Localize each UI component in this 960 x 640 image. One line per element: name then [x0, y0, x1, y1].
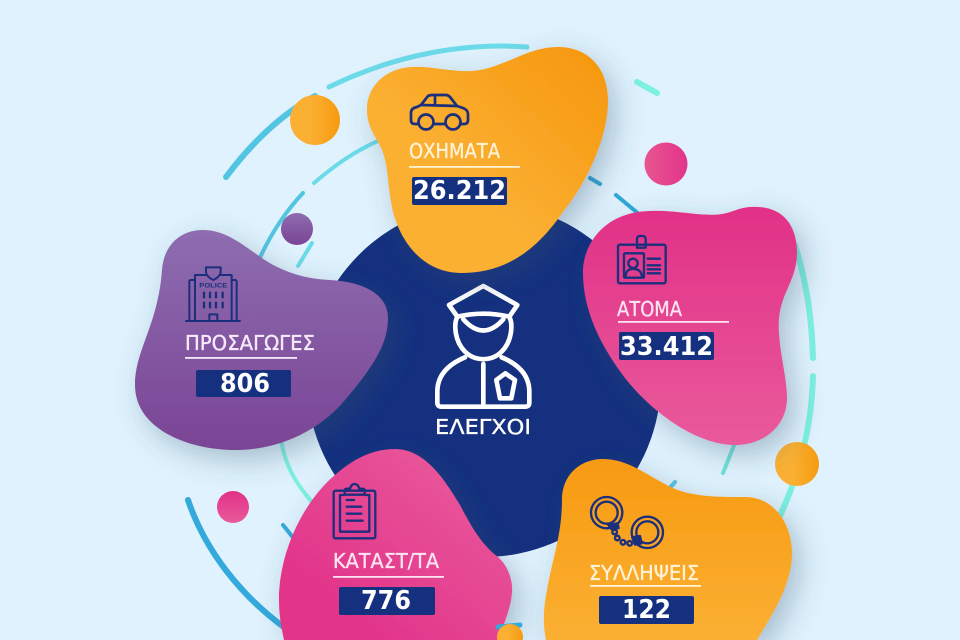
- icon: handcuffs: [591, 497, 663, 548]
- blob: pink right: [583, 207, 797, 445]
- number box: persons: 33.412: [620, 332, 713, 362]
- panel: records: [279, 449, 512, 640]
- panel: vehicles: [367, 47, 608, 273]
- label: detentions: ΠΡΟΣΑΓΩΓΕΣ: [185, 331, 315, 355]
- panel: detentions: [135, 230, 388, 450]
- label: arrests: ΣΥΛΛΗΨΕΙΣ: [589, 561, 699, 585]
- icon: police station: POLICE: [199, 283, 227, 289]
- number box: records: 776: [361, 586, 411, 616]
- blob: orange top: [367, 47, 608, 273]
- icon: clipboard: [334, 484, 375, 538]
- number box: arrests: 122: [622, 595, 671, 625]
- label: records: ΚΑΤΑΣΤ/ΤΑ: [333, 549, 439, 573]
- panel: arrests: [544, 459, 792, 640]
- label: checks: ΕΛΕΓΧΟΙ: [435, 415, 531, 439]
- central navy circle: [307, 203, 661, 557]
- blob: purple: [135, 230, 388, 450]
- dot: orange bottom: [497, 624, 523, 640]
- panel: persons: [583, 207, 797, 445]
- icon: id badge: [618, 236, 666, 283]
- label: vehicles: ΟΧΗΜΑΤΑ: [409, 139, 500, 163]
- blob: orange bottom: [544, 459, 792, 640]
- number box: detentions: 806: [220, 369, 270, 399]
- number box: arrests: [599, 595, 694, 625]
- icon: police station: [186, 267, 240, 321]
- icon: car: [411, 95, 468, 130]
- number box: records: [339, 586, 435, 616]
- bottom arc stub: [498, 625, 520, 627]
- decorative orbit arcs: [188, 46, 813, 628]
- number box: vehicles: 26.212: [413, 176, 506, 206]
- panel: central officer: [435, 286, 531, 439]
- blob: pink bottom: [279, 449, 512, 640]
- number box: detentions: [196, 369, 291, 399]
- dot: purple: [281, 213, 313, 245]
- dot: orange right: [775, 442, 819, 486]
- icon: police officer: [437, 286, 529, 407]
- dot: orange top: [290, 95, 340, 145]
- label: persons: ΑΤΟΜΑ: [617, 297, 682, 321]
- dot: pink top right: [644, 142, 688, 186]
- dot: pink bottom left: [217, 491, 249, 523]
